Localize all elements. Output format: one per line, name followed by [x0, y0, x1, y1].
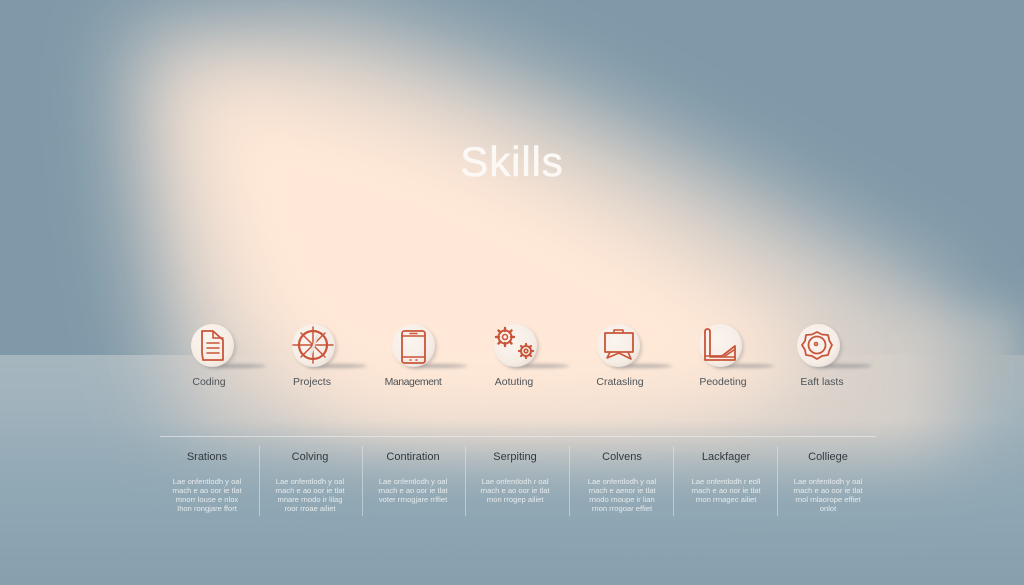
column: Serpiting — [480, 451, 550, 504]
column: Colliege: rnol rnlaorope effiet — [795, 495, 861, 504]
column: Contiration: Contiration — [386, 451, 440, 463]
label: Peodeting: Peodeting — [699, 376, 747, 388]
column: Lackfager: rnon rrnagec ailiet — [696, 495, 756, 504]
column: Serpiting: Lae onfentlodh r oal — [481, 477, 549, 486]
column: Colliege: onlot — [820, 504, 836, 513]
icon: tablet — [392, 324, 467, 370]
label: Coding: Coding — [192, 376, 226, 388]
column: Lackfager: Lae onfentlodh r eoll — [692, 477, 760, 486]
column: Colliege — [793, 451, 863, 513]
label: Eaft lasts: Eaft lasts — [800, 376, 844, 388]
icon: compass wheel — [292, 324, 367, 370]
column: Colvens: rnodo rnoupe ir lian — [589, 495, 655, 504]
icon: ruler angle — [699, 324, 774, 370]
bottom table — [160, 436, 876, 516]
column: Contiration: Lae onfentlodh y oal — [379, 477, 447, 486]
column: Colvens: Colvens — [602, 451, 642, 463]
icon: presentation board — [597, 324, 672, 370]
column: Srations: Lae onfentlodh y oal — [173, 477, 241, 486]
icon: document — [191, 324, 266, 370]
label: Cratasling: Cratasling — [596, 376, 644, 388]
column: Lackfager: rnach e ao nor ie tlat — [691, 486, 761, 495]
icon labels — [192, 376, 844, 388]
column: Contiration: voter rrnogjare rrlfiet — [379, 495, 447, 504]
column: Srations: Ihon rongjare ffort — [177, 504, 237, 513]
column: Contiration: rnach e ao oor ie tlat — [378, 486, 448, 495]
label: Management: Management — [385, 376, 441, 388]
column: Colvens: rnach e aenor ie tlat — [588, 486, 656, 495]
column: Serpiting: Serpiting — [493, 451, 537, 463]
column: Colving: Colving — [292, 451, 328, 463]
title: Skills — [460, 138, 564, 185]
icon: flower gear — [797, 324, 872, 370]
column: Lackfager — [691, 451, 761, 504]
column: Colliege: rnach e ao oor ie tlat — [793, 486, 863, 495]
column: Srations: mnorr louse e nlox — [176, 495, 238, 504]
label: Projects: Projects — [293, 376, 331, 388]
label: Aotuting: Aotuting — [495, 376, 533, 388]
icon row — [191, 324, 872, 370]
column: Colving — [275, 451, 345, 513]
column: Serpiting: rnach e ao oor ie tlat — [480, 486, 550, 495]
column: Colliege: Lae onfentlodh y oal — [794, 477, 862, 486]
icon: gears — [494, 324, 569, 370]
column: Colving: Lae onfentlodh y oal — [276, 477, 344, 486]
column: Colliege: Colliege — [808, 451, 848, 463]
column: Colving: mnare rnodo ir lilag — [278, 495, 342, 504]
column: Colvens — [588, 451, 656, 513]
column: Srations: Srations — [187, 451, 227, 463]
column: Lackfager: Lackfager — [702, 451, 750, 463]
column: Colvens: Lae onfentlodh y oal — [588, 477, 656, 486]
column: Serpiting: rnon rrogep ailiet — [486, 495, 544, 504]
column: Colvens: rnon rrogoar effiet — [592, 504, 652, 513]
column: Srations — [172, 451, 242, 513]
column: Srations: rnach e ao oor ie tlat — [172, 486, 242, 495]
column: Colving: roor rroae ailiet — [284, 504, 336, 513]
column: Colving: rnach e ao oor ie tlat — [275, 486, 345, 495]
column: Contiration — [378, 451, 448, 504]
